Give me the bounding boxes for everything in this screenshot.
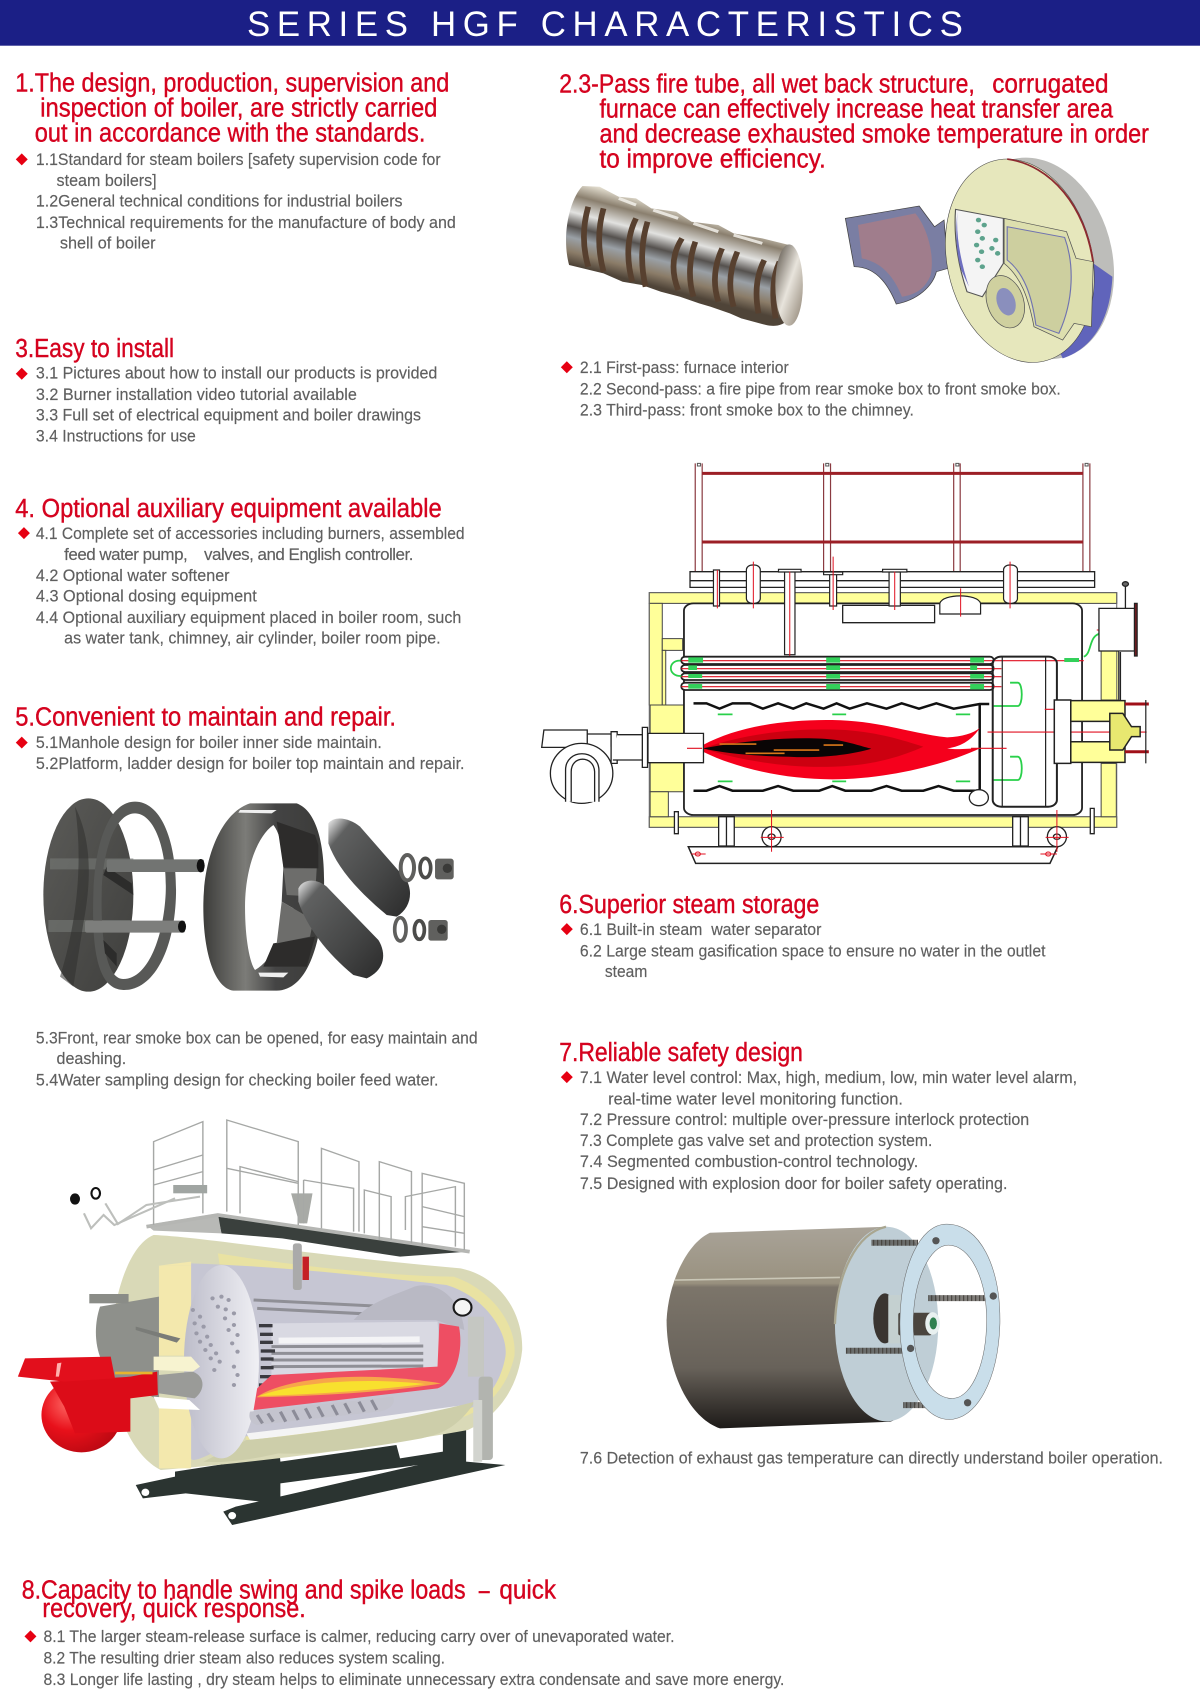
insulation block [159,1262,191,1468]
gasket ring [93,802,176,990]
gauge and water column [454,1299,493,1462]
nozzles [713,565,1017,655]
heading 5: 5.Convenient to maintain and repair. [15,704,396,732]
list 1: 1.1Standard for steam boilers [safety supervision code for [36,150,441,169]
bullet diamond [561,923,573,935]
list 7 [580,1068,1077,1193]
list 3: 3.4 Instructions for use [36,427,196,446]
heading 1: inspection of boiler, are strictly carried [40,94,437,122]
bullet diamond [561,361,573,373]
list 5 upper: 5.1Manhole design for boiler inner side maintain. [36,733,382,752]
list 5 upper: 5.2Platform, ladder design for boiler top maintain and repair. [36,754,465,773]
section 4: optional auxiliary equipment [15,495,465,648]
caption 7.6: 7.6 Detection of exhaust gas temperature can directly understand boiler operation. [580,1448,1163,1467]
tube sheet holes [191,1295,240,1387]
bullet diamond [24,1630,36,1642]
heading 2: furnace can effectively increase heat transfer area [599,96,1114,124]
fire tubes [681,657,994,690]
image: boiler section drawing [542,463,1149,863]
list 1: steam boilers] [57,171,157,190]
shell [684,603,1082,815]
frame holes [141,1489,149,1496]
list 4: 4.2 Optional water softener [36,566,230,585]
base beam [688,847,1058,863]
list 6: 6.2 Large steam gasification space to ensure no water in the outlet [580,941,1046,960]
list 1: shell of boiler [60,234,156,253]
rim blue shade [1044,263,1112,358]
heading 7: 7.Reliable safety design [559,1039,803,1067]
bullet diamond [16,737,28,749]
list 8: 8.2 The resulting drier steam also reduces system scaling. [44,1649,445,1668]
instrument pipes [70,1185,207,1228]
list 4: 4.4 Optional auxiliary equipment placed in boiler room, such [36,608,461,627]
list 5 lower: deashing. [57,1049,126,1068]
section 1: standards [15,69,456,253]
front door [96,1297,159,1400]
heading 3: 3.Easy to install [15,335,174,363]
red burner [18,1357,158,1452]
insulation casing [649,593,1118,827]
heading 8: quick [499,1576,556,1604]
list 3: 3.3 Full set of electrical equipment and boiler drawings [36,406,421,425]
hinged cover plate [1004,218,1093,340]
heading 1: 1.The design, production, supervision and [15,69,449,97]
list 1 [36,150,456,253]
rear disc [43,798,133,992]
bolts [907,1237,997,1406]
lug upper [328,819,410,917]
list 8 [44,1627,784,1689]
title: SERIES HGF CHARACTERISTICS [247,5,963,44]
fire tubes [254,1300,454,1367]
heading 2: 2.3-Pass fire tube, all wet back structure, [559,70,975,98]
list 4: feed water pump, valves, and English controller. [64,545,413,564]
hub [873,1293,897,1343]
rods [107,859,204,872]
heading 8: 8.Capacity to handle swing and spike loads [22,1576,466,1604]
list 7: 7.4 Segmented combustion-control technology. [580,1152,918,1171]
list 2: 2.2 Second-pass: a fire pipe from rear smoke box to front smoke box. [580,379,1061,398]
white rim of cutaway [246,1405,464,1440]
image: explosion door cylinder [667,1224,1000,1428]
burner flange [980,272,1031,331]
support legs [674,808,1094,847]
corrugation highlights [619,198,762,243]
list 3: 3.2 Burner installation video tutorial available [36,385,357,404]
list 8: 8.3 Longer life lasting , dry steam helps to eliminate unnecessary extra condensate and save more energy. [44,1670,784,1689]
list 1: 1.3Technical requirements for the manufacture of body and [36,213,456,232]
corrugated furnace lower [249,1397,394,1425]
list 4: 4.1 Complete set of accessories including burners, assembled [36,524,465,543]
disc rim [944,147,1132,370]
shell [111,1235,522,1470]
list 4: as water tank, chimney, air cylinder, boiler room pipe. [64,629,441,648]
opening with tubes [955,209,1003,297]
list 1: 1.2General technical conditions for industrial boilers [36,192,403,211]
list 5 lower: 5.3Front, rear smoke box can be opened, for easy maintain and [36,1028,478,1047]
bullet diamond [16,153,28,165]
smoke box [1054,700,1140,763]
list 7: real-time water level monitoring function. [608,1089,903,1108]
interior light panel [271,1322,441,1375]
heading 1 [15,69,449,147]
rear chamber [354,1285,464,1330]
image: smoke box door [845,147,1132,373]
platform and fittings [146,1193,470,1290]
image: 3D cutaway boiler [18,1120,522,1525]
flame [703,720,980,779]
studs [846,1243,990,1405]
list 8: 8.1 The larger steam-release surface is calmer, reducing carry over of unevaporated water. [44,1627,675,1646]
section 2: heading and images [559,70,1149,420]
centre lines [717,557,1127,657]
list 7: 7.3 Complete gas valve set and protection system. [580,1131,932,1150]
list 3: 3.1 Pictures about how to install our products is provided [36,364,437,383]
rear chamber [993,656,1057,807]
front plate [835,1227,938,1421]
section 6: steam storage [559,891,1046,981]
bullet diamond [561,1071,573,1083]
list 5 lower: 5.4Water sampling design for checking boiler feed water. [36,1070,438,1089]
detached door plate [845,206,948,304]
platform [690,572,1095,587]
section 8: capacity [22,1576,784,1689]
list 7: 7.2 Pressure control: multiple over-pressure interlock protection [580,1110,1029,1129]
heading 8: – [479,1576,490,1604]
steam separator box [843,605,935,623]
disc face [928,149,1112,373]
header banner [0,0,1200,46]
green tube supports [688,657,1079,689]
washers and nuts [395,855,454,941]
list 6: 6.1 Built-in steam water separator [580,920,822,939]
section 3: easy to install [15,335,437,446]
heading 4: 4. Optional auxiliary equipment available [15,495,442,523]
furnace flame [257,1377,441,1397]
list 2: 2.1 First-pass: furnace interior [580,358,789,377]
chimney nozzle [1099,582,1137,656]
tube sheet [184,1265,259,1458]
heading 2: corrugated [992,70,1109,98]
list 5 lower [36,1028,478,1089]
section 7: safety design [559,1039,1163,1467]
flange ring [900,1224,1000,1419]
heading 2 [559,70,1149,174]
list 7: 7.5 Designed with explosion door for boiler safety operating. [580,1174,1007,1193]
burner tube [159,1372,202,1398]
green flow arrows [671,633,1101,781]
cylinder body [667,1227,938,1428]
cutaway interior [191,1263,506,1460]
base frame [136,1417,505,1525]
heading 1: out in accordance with the standards. [35,119,425,147]
centre lines [687,709,1147,748]
corrugation ribs [584,207,780,318]
bullet diamond [18,527,30,539]
heading 2: and decrease exhausted smoke temperature in order [599,121,1149,149]
burner throat [648,733,703,763]
bullet diamond [16,368,28,380]
tube ends [259,1324,275,1387]
heading 6: 6.Superior steam storage [559,891,819,919]
list 5 upper [36,733,465,773]
railing [695,463,1090,572]
list 4 [36,524,465,648]
list 2: 2.3 Third-pass: front smoke box to the chimney. [580,401,914,420]
heading 2: to improve efficiency. [599,146,826,174]
image: manhole parts exploded view [43,798,454,992]
heading 8 [22,1576,556,1623]
list 2 [580,358,1061,420]
shell lower band [204,1402,475,1462]
image: corrugated furnace tube [566,186,803,326]
list 6 [580,920,1046,981]
list 7: 7.1 Water level control: Max, high, medium, low, min water level alarm, [580,1068,1077,1087]
railings [154,1120,464,1250]
section 5: maintenance [15,704,478,1089]
corrugations [257,1400,377,1423]
heading 8: recovery, quick response. [42,1595,306,1623]
list 3 [36,364,437,446]
corrugated furnace [693,703,989,792]
list 6: steam [605,962,647,981]
burner [542,730,642,803]
manhole [969,790,988,806]
lug lower [298,881,383,978]
list 4: 4.3 Optional dosing equipment [36,587,257,606]
steel ring [203,803,324,991]
